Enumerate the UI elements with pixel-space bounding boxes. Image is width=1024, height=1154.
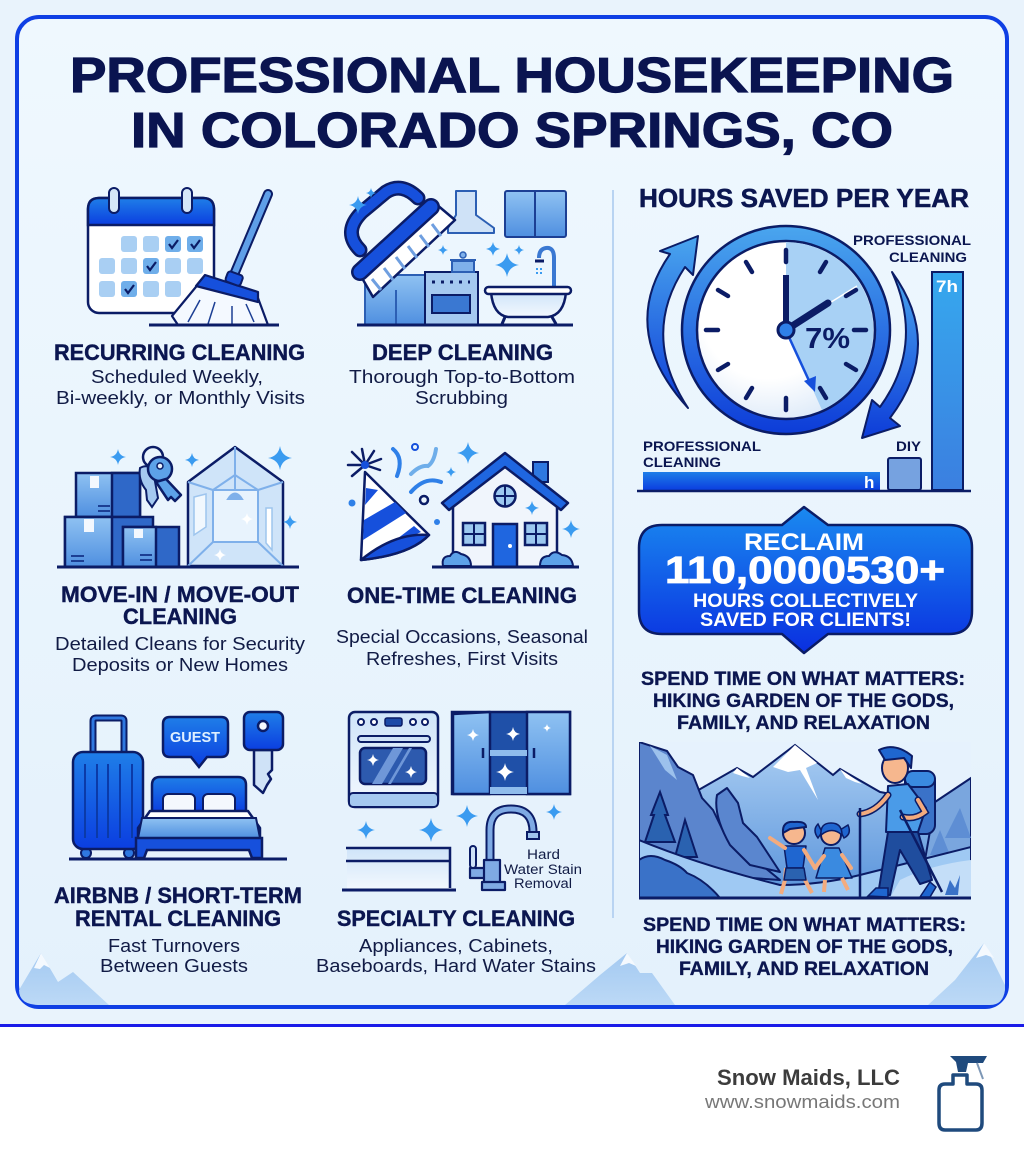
bar: professional horizontal: h <box>864 473 874 492</box>
description: Scheduled Weekly, <box>91 367 263 387</box>
description <box>56 367 305 408</box>
illustration: family hiking in the mountains <box>639 742 971 898</box>
description: Scrubbing <box>415 388 508 408</box>
heading <box>54 883 302 931</box>
description: Special Occasions, Seasonal <box>336 627 588 647</box>
text block: spend time upper: SPEND TIME ON WHAT MATTERS: <box>641 668 965 690</box>
label: professional cleaning top: CLEANING <box>889 249 967 265</box>
label: professional cleaning left: CLEANING <box>643 454 721 470</box>
heading: RECURRING CLEANING <box>54 340 305 365</box>
icon: boxes, keys and empty room <box>57 446 299 567</box>
hard water stain label: Removal <box>514 876 572 891</box>
description: Between Guests <box>100 956 248 976</box>
icon: oven, cabinet, baseboard and faucet <box>342 712 582 891</box>
text block: spend time lower: FAMILY, AND RELAXATION <box>679 958 929 980</box>
panel: specialty cleaning <box>316 712 596 976</box>
heading: HOURS SAVED PER YEAR <box>639 183 969 213</box>
icon: kitchen, brush and bath <box>349 188 573 325</box>
title: IN COLORADO SPRINGS, CO <box>131 104 893 158</box>
bar: tall 7h: 7h <box>936 277 958 296</box>
heading: CLEANING <box>123 604 237 629</box>
label: professional cleaning left: PROFESSIONAL <box>643 438 761 454</box>
heading: AIRBNB / SHORT-TERM <box>54 883 302 908</box>
text block: spend time upper: FAMILY, AND RELAXATION <box>677 712 930 734</box>
text block: spend time lower: SPEND TIME ON WHAT MATTERS: <box>643 914 966 936</box>
icon: party hat and house <box>348 442 580 567</box>
description <box>100 936 248 976</box>
hard water stain label: Hard <box>527 847 560 862</box>
bar: professional horizontal <box>643 472 880 492</box>
description: Thorough Top-to-Bottom <box>349 367 575 387</box>
callout: reclaim hours: HOURS COLLECTIVELY <box>693 590 918 612</box>
heading: DEEP CLEANING <box>372 340 553 365</box>
text block: spend time upper <box>641 668 965 734</box>
callout: reclaim hours: 110,0000530+ <box>665 550 945 592</box>
arrow: right circular arrow <box>862 272 918 438</box>
father hiker <box>860 747 942 898</box>
panel: deep cleaning <box>349 188 575 408</box>
description: Detailed Cleans for Security <box>55 634 305 654</box>
icon: spray bottle <box>939 1056 987 1130</box>
icon: suitcase, bed, guest bubble and key <box>69 712 287 859</box>
description <box>336 627 588 669</box>
bar: diy: DIY <box>896 438 922 454</box>
heading: MOVE-IN / MOVE-OUT <box>61 582 300 607</box>
divider <box>612 190 614 918</box>
description <box>316 936 596 976</box>
description <box>55 634 305 675</box>
description: Deposits or New Homes <box>72 655 288 675</box>
callout: reclaim hours: RECLAIM <box>744 529 864 556</box>
description: Baseboards, Hard Water Stains <box>316 956 596 976</box>
footer <box>0 1024 1024 1154</box>
heading: SPECIALTY CLEANING <box>337 906 575 931</box>
footer brand name: Snow Maids, LLC <box>717 1065 900 1090</box>
callout: reclaim hours <box>639 507 972 653</box>
icon: clock with 7 percent wedge <box>682 226 890 434</box>
bar: tall 7h <box>932 272 963 490</box>
panel: move-in move-out cleaning <box>55 446 305 675</box>
description <box>349 367 575 408</box>
panel: recurring cleaning <box>54 188 305 408</box>
text block: spend time lower <box>643 914 966 980</box>
bar chart: hours saved <box>637 232 971 492</box>
title <box>70 49 954 158</box>
children hikers <box>770 822 852 894</box>
hard water stain label <box>504 847 582 891</box>
callout: reclaim hours: SAVED FOR CLIENTS! <box>700 609 911 631</box>
label: professional cleaning top: PROFESSIONAL <box>853 232 971 248</box>
corner mountains <box>19 943 1005 1005</box>
title: PROFESSIONAL HOUSEKEEPING <box>70 49 954 103</box>
text block: spend time lower: HIKING GARDEN OF THE GODS, <box>656 936 953 958</box>
heading: ONE-TIME CLEANING <box>347 583 577 608</box>
panel: airbnb short-term rental cleaning <box>54 712 302 976</box>
heading <box>61 582 300 629</box>
heading: RENTAL CLEANING <box>75 906 281 931</box>
clock percent: 7% <box>805 323 850 355</box>
bar: diy <box>888 438 922 490</box>
panel: hours saved per year <box>637 183 971 492</box>
guest label: GUEST <box>170 729 220 746</box>
label: professional cleaning top <box>853 232 971 265</box>
text block: spend time upper: HIKING GARDEN OF THE GODS, <box>653 690 954 712</box>
label: professional cleaning left <box>643 438 761 470</box>
description: Refreshes, First Visits <box>366 649 558 669</box>
description: Appliances, Cabinets, <box>359 936 553 956</box>
hard water stain label: Water Stain <box>504 862 582 877</box>
description: Bi-weekly, or Monthly Visits <box>56 388 305 408</box>
arrow: left circular arrow <box>647 236 698 408</box>
icon: calendar and broom <box>88 188 279 325</box>
footer website: www.snowmaids.com <box>704 1091 900 1112</box>
panel: one-time cleaning <box>336 442 588 669</box>
description: Fast Turnovers <box>108 936 240 956</box>
